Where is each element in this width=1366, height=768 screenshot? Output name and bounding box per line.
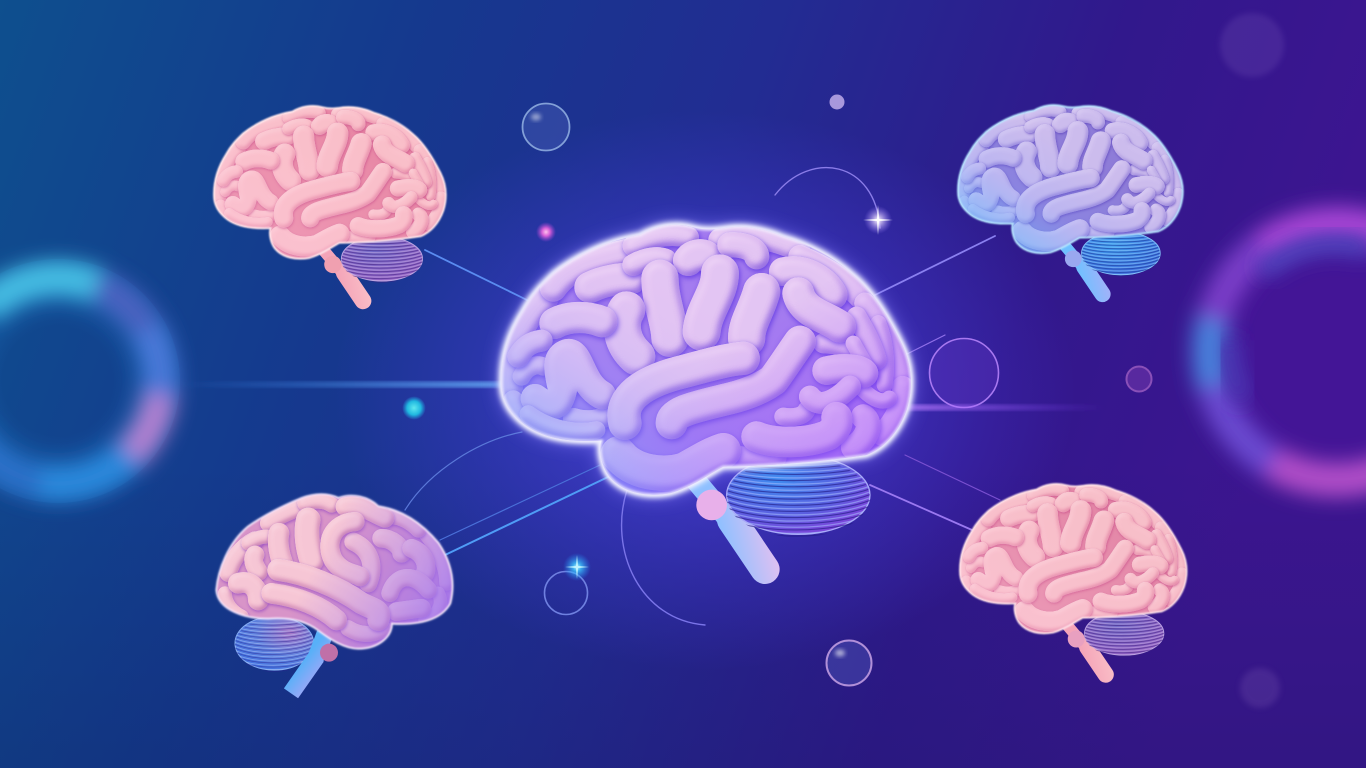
cerebellum — [1083, 612, 1166, 656]
brain stem — [1068, 626, 1106, 675]
connector lines — [405, 168, 1000, 625]
cortex folds — [214, 106, 446, 259]
pons — [324, 256, 342, 273]
sparkle: white — [863, 205, 893, 235]
cerebellum — [723, 456, 873, 536]
cortex folds — [502, 225, 911, 495]
cortex folds — [960, 484, 1186, 633]
brain stem — [697, 482, 765, 569]
horizontal flare left — [180, 382, 505, 387]
bubble: small right — [1126, 366, 1152, 392]
horizontal flare right — [905, 405, 1105, 410]
brain: top right lilac — [958, 105, 1183, 294]
brain: centre — [502, 225, 911, 569]
bubble: small bottom — [826, 640, 872, 686]
bubble: faint bottom right — [1240, 668, 1280, 708]
brain stem — [1065, 246, 1103, 294]
central glow — [335, 110, 1075, 670]
cerebellum — [1080, 232, 1162, 276]
pons — [1065, 250, 1082, 267]
sparkle: cyan — [563, 553, 591, 581]
bubble: ring lower left — [544, 572, 588, 614]
pons — [320, 644, 338, 662]
cortex folds — [217, 495, 452, 648]
cerebellum — [339, 237, 424, 282]
pons — [696, 490, 727, 520]
brain stem — [291, 633, 325, 693]
bubble: faint top right — [1220, 13, 1284, 77]
brain: top left pink — [214, 106, 446, 301]
cortex folds — [958, 105, 1183, 253]
brain: bottom right pink — [960, 484, 1186, 675]
dot: pale top — [830, 94, 844, 110]
dot: cyan — [402, 396, 426, 420]
brain stem — [324, 251, 363, 301]
bubble: ring right of centre — [930, 338, 998, 408]
pons — [1068, 630, 1085, 647]
bubble: small top — [522, 103, 570, 151]
bubble: large right — [1209, 224, 1366, 480]
dot: pink — [536, 222, 556, 242]
brain: bottom left — [217, 495, 452, 693]
bubble: large left — [0, 259, 180, 503]
cerebellum — [233, 617, 316, 671]
